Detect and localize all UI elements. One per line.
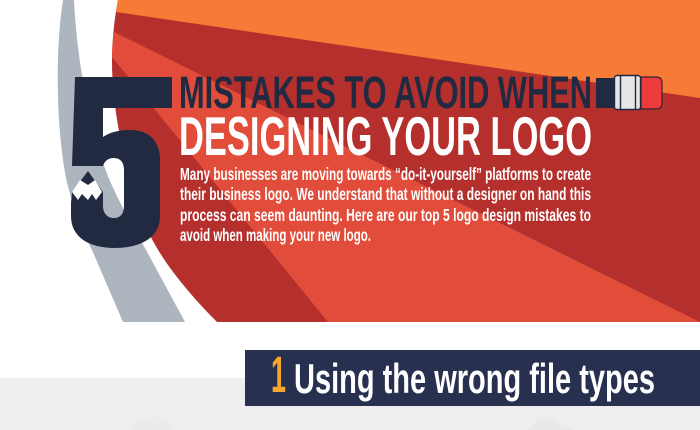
grey lower background: [0, 378, 700, 430]
icon: pencil tip: [72, 180, 102, 200]
intro paragraph: avoid when making your new logo.: [180, 225, 371, 245]
number 1: 1: [271, 346, 286, 403]
big number 5 with pencil tip: [71, 77, 172, 248]
icon: pencil eraser: [596, 76, 662, 110]
section heading: mistake 1: [245, 346, 700, 406]
grey arc: [58, 0, 185, 322]
banner: radiating red and orange background: [112, 0, 700, 322]
intro paragraph: [180, 164, 591, 245]
